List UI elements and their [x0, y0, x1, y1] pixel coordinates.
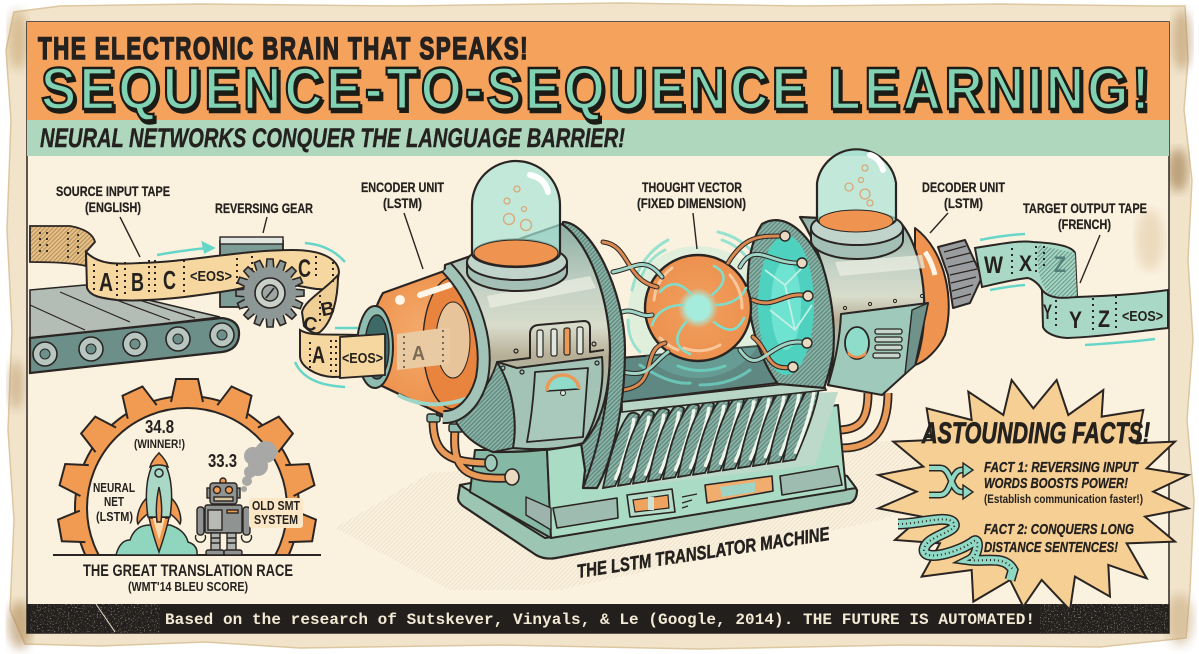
- fact 1: [984, 459, 1143, 506]
- icon: shuffle arrows: [929, 463, 973, 499]
- fact 1: WORDS BOOSTS POWER!: [984, 475, 1128, 492]
- label: decoder unit: DECODER UNIT: [922, 180, 1006, 195]
- machine caption: THE LSTM TRANSLATOR MACHINE: [576, 524, 832, 583]
- output tape letters: Y: [1069, 307, 1082, 334]
- race scores and labels: [83, 417, 303, 594]
- decoder unit: [800, 217, 982, 395]
- subtitle: NEURAL NETWORKS CONQUER THE LANGUAGE BARRIER!: [40, 123, 625, 153]
- label: source input tape: [56, 184, 170, 257]
- race scores and labels: SYSTEM: [254, 512, 298, 527]
- output tape letters: Y: [1043, 301, 1052, 324]
- race scores and labels: THE GREAT TRANSLATION RACE: [83, 561, 293, 580]
- tape letters: C: [298, 255, 311, 283]
- race scores and labels: 34.8: [145, 417, 174, 437]
- race scores and labels: NEURAL: [93, 480, 135, 495]
- cooling fins: [597, 386, 838, 490]
- encoder unit: [357, 222, 625, 488]
- right pipes: [838, 393, 888, 448]
- thought chamber: [620, 232, 826, 412]
- title kicker: THE ELECTRONIC BRAIN THAT SPEAKS!: [38, 30, 529, 66]
- fact 2: [984, 521, 1134, 556]
- race scores and labels: (LSTM): [96, 509, 133, 524]
- race scores and labels: NET: [104, 494, 124, 509]
- panel: translation race: [53, 378, 321, 594]
- label: encoder unit: ENCODER UNIT: [361, 180, 445, 195]
- left pipes: [427, 414, 519, 485]
- output tape letters: W: [984, 252, 1003, 279]
- label: encoder unit: (LSTM): [383, 196, 422, 211]
- label: target output tape: TARGET OUTPUT TAPE: [1023, 201, 1147, 216]
- label: thought vector: [637, 180, 746, 249]
- label: encoder unit: [361, 180, 445, 269]
- orange gear frame: [56, 378, 318, 554]
- footer bar: [27, 604, 1169, 633]
- fact 2: DISTANCE SENTENCES!: [984, 539, 1118, 556]
- orange lens: [371, 270, 480, 415]
- tape letters: <EOS>: [190, 269, 232, 285]
- fact 2: FACT 2: CONQUERS LONG: [984, 521, 1134, 538]
- tape letters: C: [301, 313, 319, 336]
- label: thought vector: (FIXED DIMENSION): [637, 196, 746, 211]
- flow arrows on input tape: [157, 243, 358, 387]
- race scores and labels: (WMT'14 BLEU SCORE): [128, 579, 248, 594]
- tape inside encoder: A: [412, 343, 425, 365]
- label: source input tape: SOURCE INPUT TAPE: [56, 184, 170, 199]
- panel: astounding facts starburst: [878, 380, 1188, 610]
- output tape letters: X: [1019, 251, 1032, 276]
- fact 1: FACT 1: REVERSING INPUT: [984, 459, 1139, 476]
- output tape letters: Z: [1098, 306, 1110, 333]
- label: reversing gear: [215, 201, 313, 233]
- output tape letters: [984, 251, 1163, 334]
- label: reversing gear: REVERSING GEAR: [215, 201, 313, 216]
- labels: [56, 180, 1147, 283]
- header band: [27, 22, 1169, 156]
- robot: [196, 478, 252, 555]
- tape letters: A: [312, 342, 325, 369]
- connector: [938, 240, 982, 308]
- tape letters: C: [163, 265, 176, 295]
- race scores and labels: (WINNER!): [134, 437, 185, 451]
- label: decoder unit: (LSTM): [944, 196, 983, 211]
- race scores and labels: 33.3: [208, 451, 237, 471]
- thought vector sphere: [645, 255, 751, 361]
- encoder vacuum dome: [467, 161, 567, 291]
- tape inside encoder: [340, 327, 450, 378]
- tape inside encoder: <EOS>: [342, 351, 383, 367]
- output tape: [975, 234, 1168, 345]
- tape letters: [99, 255, 337, 369]
- tape letters: B: [131, 267, 144, 297]
- output tape letters: Z: [1054, 252, 1066, 277]
- conveyor belt: [30, 285, 239, 373]
- fact 1: (Establish communication faster!): [984, 492, 1143, 506]
- connecting wires: [603, 231, 813, 390]
- label: source input tape: (ENGLISH): [85, 200, 141, 215]
- decoder vacuum dome: [811, 149, 903, 259]
- source input tape: [30, 226, 368, 377]
- race scores and labels: OLD SMT: [252, 498, 300, 513]
- machine base and pedestal: [458, 405, 857, 559]
- label: target output tape: (FRENCH): [1058, 217, 1111, 232]
- smoke: [241, 441, 277, 492]
- icon: ribbon tape: [898, 519, 1013, 580]
- label: thought vector: THOUGHT VECTOR: [642, 180, 742, 195]
- rocket: [116, 453, 197, 555]
- decoder back plate: [748, 220, 836, 388]
- tape letters: A: [99, 267, 113, 297]
- label: target output tape: [1023, 201, 1147, 283]
- tape letters: B: [319, 298, 337, 321]
- gauge: [547, 375, 579, 391]
- output tape letters: <EOS>: [1122, 309, 1163, 325]
- label: decoder unit: [922, 180, 1006, 233]
- lower housing: [455, 362, 515, 452]
- icon: reversing gear: [236, 259, 304, 327]
- footer bar: Based on the research of Sutskever, Vinyals, & Le (Google, 2014). THE FUTURE IS AUTOMATED!: [165, 611, 1035, 629]
